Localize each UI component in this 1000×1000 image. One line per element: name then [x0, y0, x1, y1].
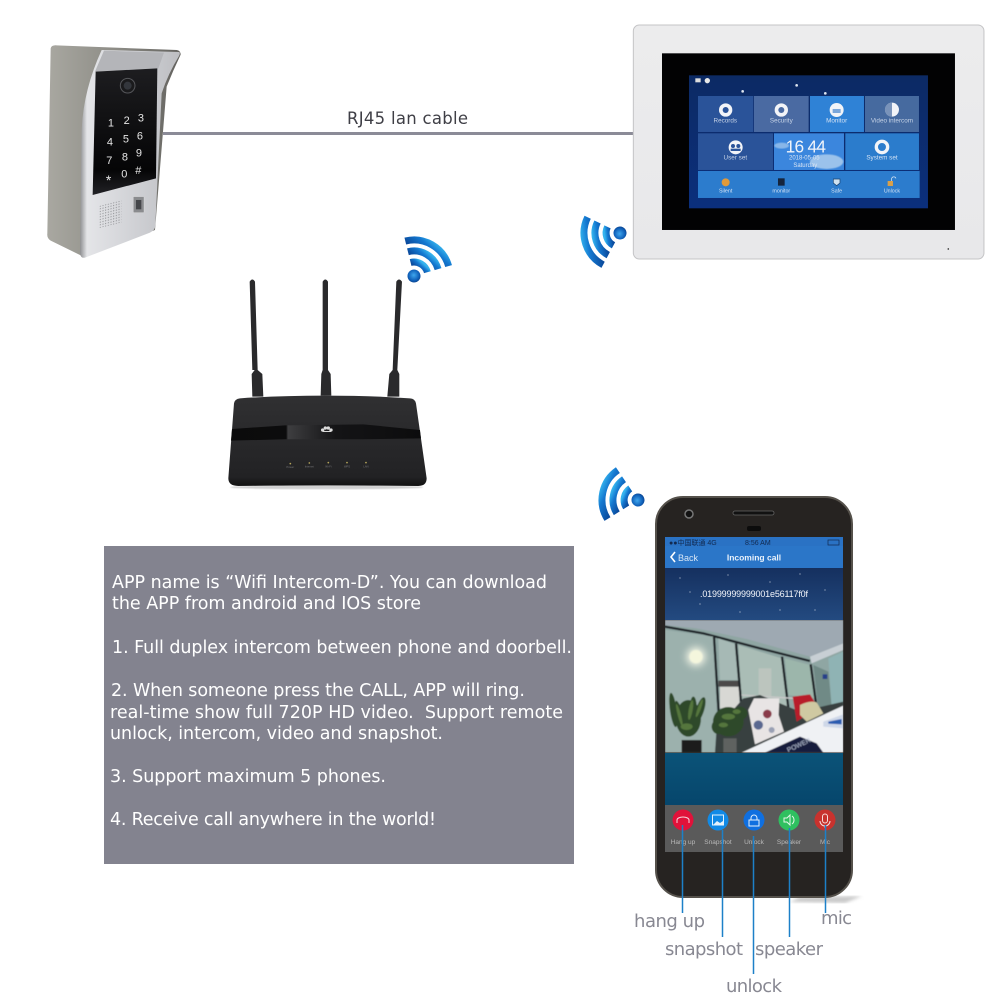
monitor frame — [633, 25, 984, 259]
feature 3: 3. Support maximum 5 phones. — [110, 767, 386, 787]
bottom action bar — [698, 171, 920, 198]
panel: app description — [104, 546, 574, 864]
tile: Security: Security — [770, 117, 794, 124]
callout: speaker — [755, 828, 824, 960]
router status lights — [289, 462, 367, 464]
button: unlock — [744, 810, 765, 846]
callout: snapshot — [665, 830, 743, 960]
tile: Video intercom — [865, 96, 919, 132]
phone teal panel — [665, 753, 843, 805]
phone header bar: Back — [678, 553, 699, 563]
bottom action bar: Safe — [831, 189, 842, 195]
indoor monitor — [633, 25, 984, 259]
tile: Records: Records — [714, 117, 737, 124]
phone status bar: 8:56 AM — [745, 540, 771, 547]
bottom action bar: monitor — [772, 189, 790, 195]
tile: User set: User set — [724, 155, 747, 162]
tile: User set — [698, 133, 773, 170]
wifi icon: router — [389, 232, 454, 294]
router stripe — [231, 424, 421, 441]
app name paragraph — [112, 573, 547, 614]
router light labels: Internet — [305, 464, 314, 468]
feature 1: 1. Full duplex intercom between phone and doorbell. — [112, 638, 572, 658]
tile: System set: System set — [866, 155, 898, 162]
phone status bar — [665, 537, 843, 547]
tile: Monitor: Monitor — [826, 117, 847, 124]
camera lens — [120, 78, 135, 93]
phone control bar — [665, 805, 843, 852]
feature 4: 4. Receive call anywhere in the world! — [110, 810, 436, 830]
keypad digits: # — [135, 165, 142, 177]
router — [228, 279, 427, 489]
tile: clock: 16 44 — [786, 136, 826, 156]
phone body — [656, 497, 852, 897]
feature 2: 2. When someone press the CALL, APP will ring. — [111, 681, 525, 701]
button: unlock: Unlock — [744, 839, 765, 846]
tile: Video intercom: Video intercom — [871, 117, 913, 124]
router light labels: WPS — [344, 464, 350, 468]
button: snapshot: Snapshot — [704, 839, 732, 846]
keypad digits: 9 — [136, 148, 142, 160]
keypad digits: 5 — [123, 133, 129, 145]
tile: System set — [845, 133, 919, 170]
bottom action bar: Unlock — [884, 189, 900, 195]
app name paragraph: the APP from android and IOS store — [112, 594, 421, 614]
callout: snapshot: snapshot — [665, 939, 743, 960]
desk — [742, 706, 843, 753]
callout: hang up — [634, 825, 705, 932]
app name paragraph: APP name is “Wifi Intercom-D”. You can download — [112, 573, 547, 593]
phone starry panel — [665, 568, 843, 620]
keypad digits: 3 — [138, 113, 144, 125]
doorbell keypad panel — [93, 68, 157, 195]
plants — [668, 692, 747, 753]
tile: clock: 2018-05-05 — [789, 156, 820, 162]
keypad digits: 1 — [108, 118, 114, 130]
tile: Security — [754, 96, 809, 132]
router light labels: Power — [287, 465, 294, 469]
doorbell housing side — [47, 45, 181, 257]
monitor black bezel — [662, 53, 955, 230]
callout: mic: mic — [821, 908, 852, 929]
keypad digits: 7 — [106, 155, 112, 167]
monitor screen — [689, 75, 928, 208]
router antennas — [250, 279, 402, 397]
feature 2: unlock, intercom, video and snapshot. — [110, 724, 443, 744]
button: speaker — [777, 810, 802, 846]
tile: Monitor — [810, 96, 864, 132]
chair — [793, 694, 817, 722]
phone header bar — [665, 546, 843, 568]
bottom action bar: Silent — [719, 189, 733, 195]
wifi icon: monitor — [578, 207, 634, 268]
router light labels: Wi-Fi — [325, 464, 332, 468]
doorbell unit — [47, 45, 181, 258]
callout: unlock: unlock — [726, 976, 783, 997]
button: snapshot — [704, 810, 732, 846]
feature 2 — [110, 681, 563, 744]
connection line: RJ45 lan cable — [163, 109, 634, 135]
phone side buttons — [851, 593, 853, 700]
phone header bar: Incoming call — [727, 552, 781, 562]
phone status bar: ●●中国联通 4G — [669, 538, 717, 547]
button: hang up — [671, 810, 696, 846]
phone video photo: POWER — [786, 737, 812, 754]
pillow — [748, 698, 784, 744]
keypad digits: 8 — [122, 152, 128, 164]
router light labels — [287, 464, 369, 469]
wifi icon: phone — [598, 468, 650, 526]
call button — [133, 197, 144, 213]
button: hang up: Hang up — [671, 839, 696, 846]
callout: speaker: speaker — [755, 939, 824, 960]
keypad digits: 0 — [121, 168, 127, 180]
router logo — [321, 426, 333, 432]
button: mic — [814, 810, 836, 846]
keypad digits: 4 — [107, 137, 113, 149]
tile: Records — [698, 96, 753, 132]
button: mic: Mic — [820, 839, 831, 846]
phone camera and earpiece — [685, 510, 774, 531]
speaker grille — [99, 201, 121, 228]
keypad digits: * — [106, 172, 112, 188]
keypad digits: 6 — [137, 130, 143, 142]
tile: clock — [774, 133, 844, 170]
phone shadow — [790, 896, 862, 903]
router body — [228, 396, 427, 486]
feature 2: real-time show full 720P HD video. Support remote — [110, 703, 563, 723]
cable label: RJ45 lan cable — [347, 109, 468, 128]
keypad digits — [106, 113, 144, 188]
callout: hang up: hang up — [634, 911, 705, 932]
doorbell silver face — [80, 50, 180, 258]
tile: clock: Saturday — [793, 163, 817, 169]
phone starry panel: .01999999999001e56117f0f — [700, 589, 808, 599]
phone video photo — [665, 620, 843, 754]
button: speaker: Speaker — [777, 839, 802, 846]
smartphone — [656, 497, 862, 903]
callout: mic — [821, 825, 852, 929]
router light labels: LAN — [363, 464, 369, 468]
keypad digits: 2 — [124, 115, 130, 127]
